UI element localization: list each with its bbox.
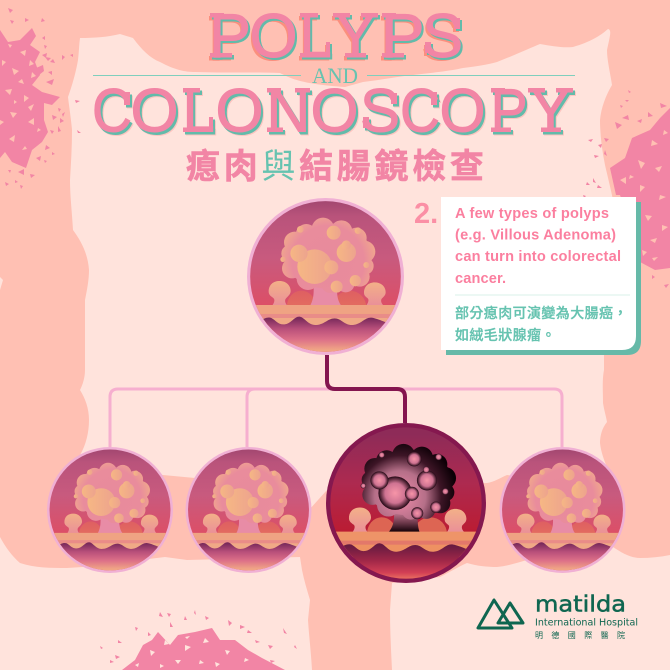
title: COLONOSCOPY: Y: [532, 79, 572, 147]
circle: polyp 4: [499, 446, 627, 574]
title: COLONOSCOPY: C: [403, 80, 443, 148]
title: POLYPS: L: [300, 2, 332, 71]
english text: [455, 206, 621, 287]
title: POLYPS: P: [381, 2, 425, 71]
title divider: AND: AND: [312, 63, 358, 88]
title: COLONOSCOPY: Y: [534, 80, 574, 148]
title: COLONOSCOPY: N: [269, 80, 313, 148]
title: COLONOSCOPY: O: [218, 79, 266, 147]
logo: [478, 593, 638, 640]
title: COLONOSCOPY: Y: [530, 76, 570, 144]
english text: can turn into colorectal: [455, 249, 621, 265]
title: POLYPS: P: [208, 5, 250, 74]
title: COLONOSCOPY: N: [266, 76, 310, 144]
title: COLONOSCOPY: C: [402, 79, 442, 147]
icon: logo triangles: [478, 600, 523, 628]
title: POLYPS: S: [424, 4, 465, 73]
title: COLONOSCOPY: C: [94, 79, 134, 147]
title: COLONOSCOPY: C: [400, 76, 440, 144]
title: COLONOSCOPY: L: [183, 76, 215, 144]
title: COLONOSCOPY: P: [494, 80, 531, 148]
title: COLONOSCOPY: O: [310, 76, 358, 144]
splatter: right: [583, 90, 670, 288]
logo: matilda: [535, 593, 626, 618]
title: COLONOSCOPY: S: [360, 76, 400, 144]
title: POLYPS: O: [252, 4, 300, 73]
title: POLYPS: O: [250, 2, 298, 71]
chinese text: 如絨毛狀腺瘤。: [455, 327, 556, 343]
chinese text: 部分瘜肉可演變為大腸癌，: [455, 305, 628, 321]
logo: International Hospital: [535, 618, 638, 629]
title: COLONOSCOPY: C: [95, 80, 135, 148]
title: POLYPS: Y: [334, 5, 374, 74]
title: POLYPS: Y: [338, 4, 378, 73]
title: COLONOSCOPY: O: [130, 76, 178, 144]
title: COLONOSCOPY: O: [132, 79, 180, 147]
title: POLYPS: S: [421, 5, 462, 74]
splatter: left: [0, 8, 81, 189]
title: POLYPS: L: [302, 4, 334, 73]
title: COLONOSCOPY: C: [92, 76, 132, 144]
title: COLONOSCOPY: O: [440, 76, 486, 144]
circle: polyp 2: [185, 446, 313, 574]
title: COLONOSCOPY: O: [312, 79, 360, 147]
english text: A few types of polyps: [455, 206, 609, 222]
title: COLONOSCOPY: O: [314, 80, 362, 148]
title: COLONOSCOPY: P: [491, 76, 528, 144]
title: POLYPS: [208, 2, 465, 74]
connector line: dark: [327, 355, 405, 423]
english text: (e.g. Villous Adenoma): [455, 228, 616, 244]
splatter: bottom: [100, 610, 297, 670]
title: Chinese: 瘜肉與結腸鏡檢查: [186, 148, 488, 186]
step number: 2.: [414, 198, 438, 230]
circle: polyp 1: [46, 446, 175, 574]
english text: cancer.: [455, 271, 506, 287]
title: COLONOSCOPY: S: [363, 80, 403, 148]
title: COLONOSCOPY: S: [362, 79, 402, 147]
title: POLYPS: P: [383, 4, 427, 73]
circle: top polyp: [246, 197, 406, 357]
callout card: [441, 197, 641, 355]
title: COLONOSCOPY: L: [186, 80, 218, 148]
title: POLYPS: S: [422, 2, 463, 71]
title: COLONOSCOPY: O: [442, 80, 488, 148]
title: POLYPS: Y: [336, 2, 376, 71]
chinese text: [455, 305, 628, 343]
title: COLONOSCOPY: N: [268, 79, 312, 147]
title: COLONOSCOPY: O: [442, 79, 488, 147]
title: COLONOSCOPY: O: [134, 80, 182, 148]
title: POLYPS: P: [380, 5, 424, 74]
title: COLONOSCOPY: O: [216, 76, 264, 144]
title: POLYPS: L: [299, 5, 331, 74]
title: COLONOSCOPY: O: [218, 80, 266, 148]
title: POLYPS: O: [248, 5, 296, 74]
title: POLYPS: P: [209, 2, 251, 71]
title: COLONOSCOPY: [92, 76, 576, 148]
title: COLONOSCOPY: P: [493, 79, 530, 147]
connector lines: light: [110, 389, 562, 447]
title: POLYPS: P: [211, 4, 253, 73]
title: COLONOSCOPY: L: [185, 79, 217, 147]
circle: cancerous polyp: [326, 423, 487, 583]
logo: 明德國際醫院: [535, 630, 633, 640]
